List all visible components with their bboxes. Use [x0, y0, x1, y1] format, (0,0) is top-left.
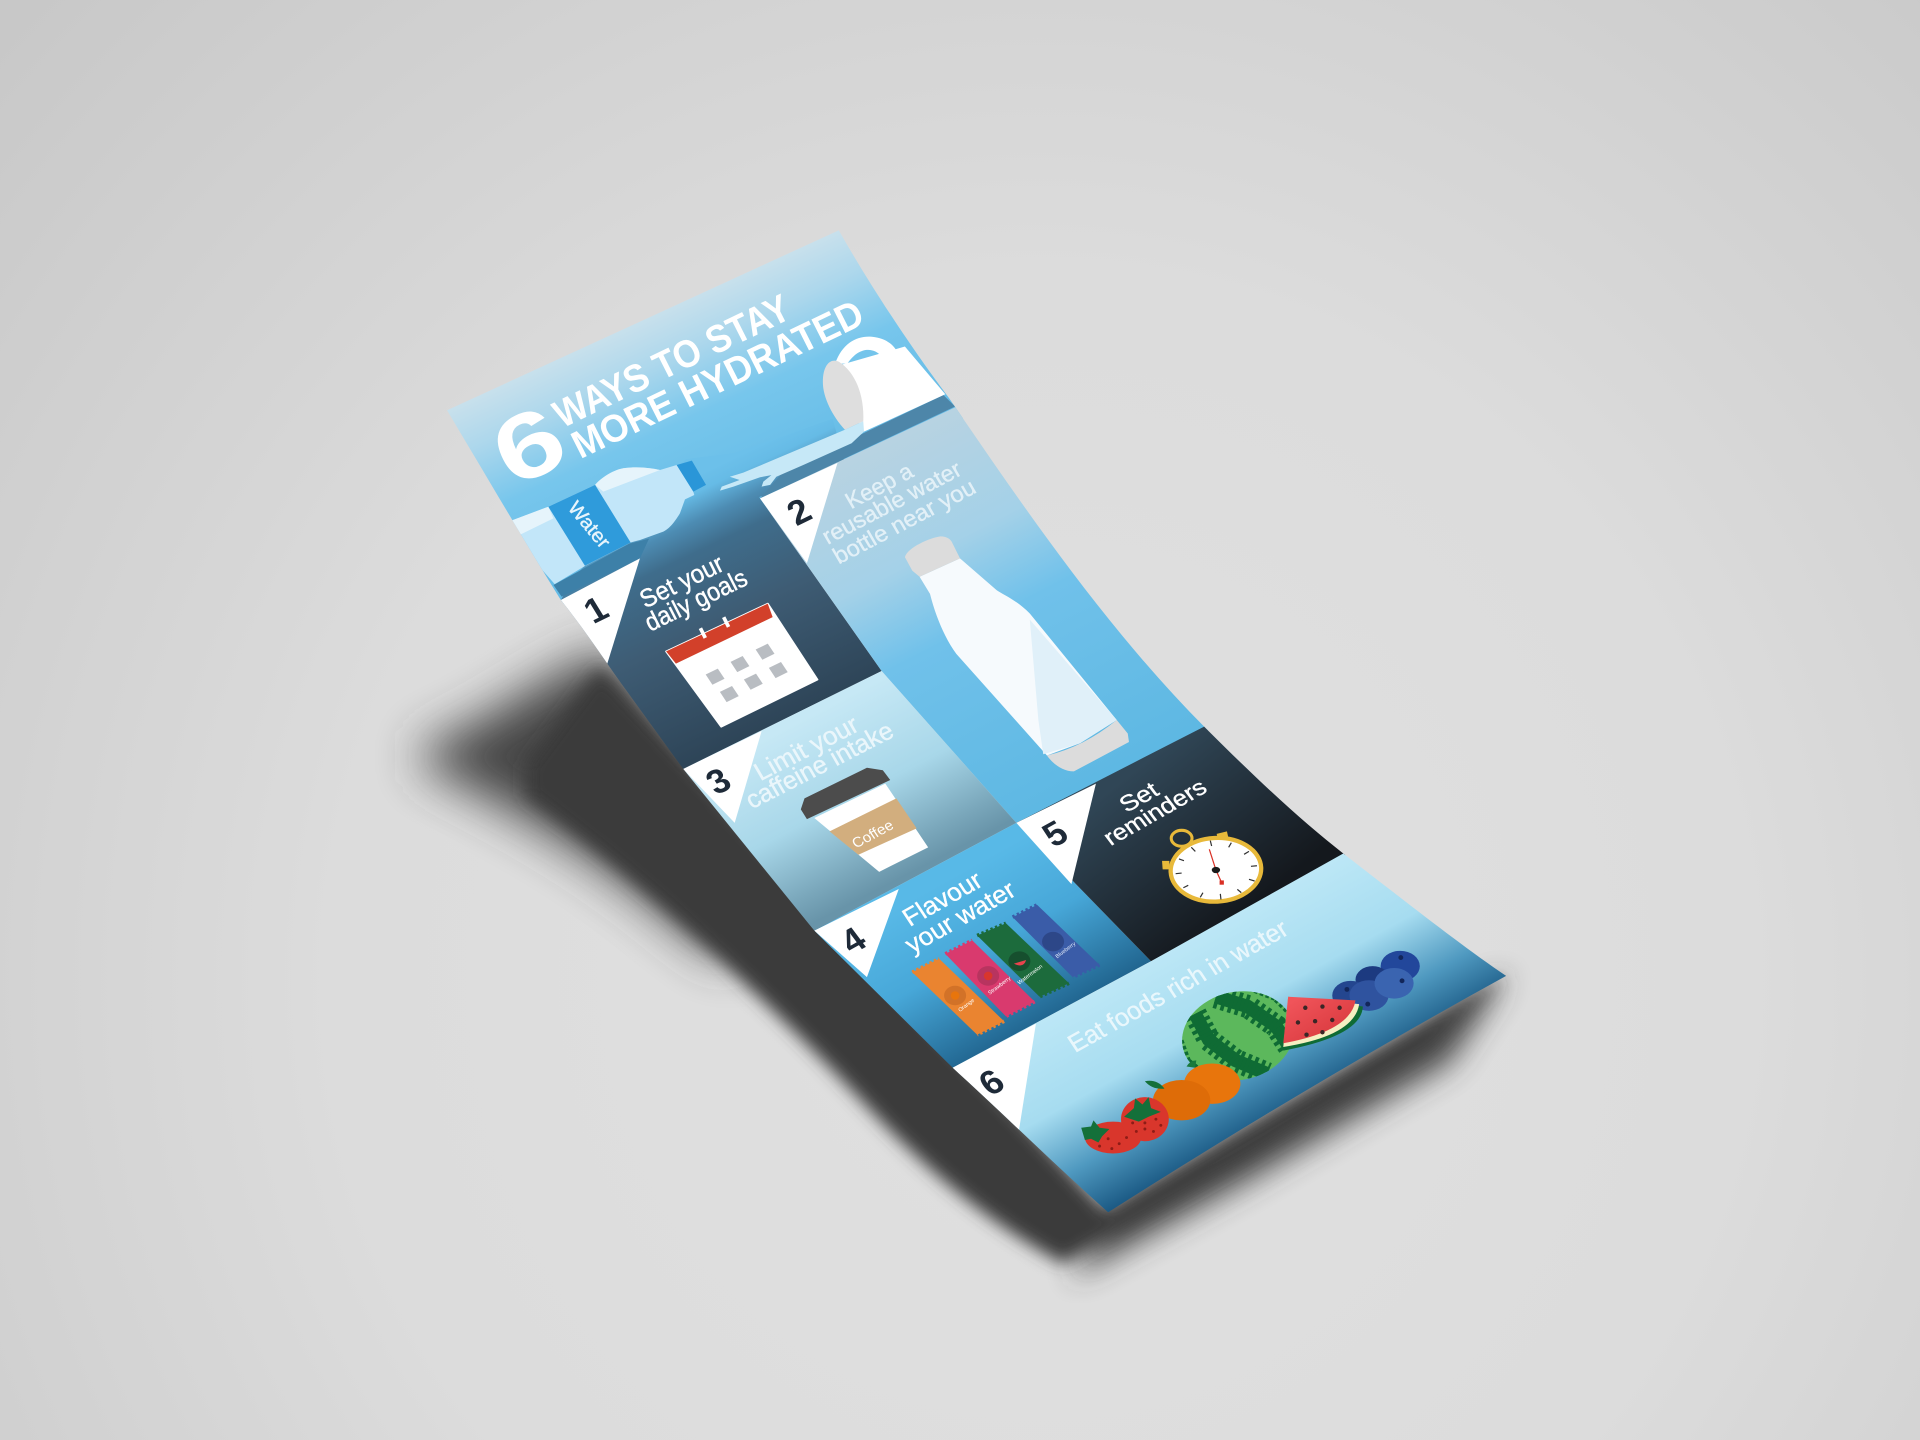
heading: limit your caffeine intake: Limit your [749, 711, 864, 786]
icon: calendar [666, 604, 817, 727]
label: coffee: Coffee [849, 818, 897, 852]
icon: fruit group [1081, 951, 1420, 1153]
sachet: orange [912, 959, 1004, 1035]
heading: set your daily goals: Set your [635, 550, 729, 614]
number tab 3: 3 [698, 760, 738, 802]
number tab 5 [1016, 784, 1096, 884]
sachet: blueberry [1013, 905, 1100, 977]
panel 3: caffeine [683, 671, 1016, 931]
number tab 3 [683, 731, 762, 823]
poster shadow [422, 649, 1509, 1280]
heading: set reminders: Set [1114, 777, 1164, 817]
panel 5: reminders [1016, 722, 1353, 961]
heading: keep a reusable water bottle near you: Keep a [840, 458, 918, 514]
panel 2: reusable bottle [760, 402, 1224, 823]
sachet: watermelon: Watermelon [1017, 964, 1044, 986]
panel: header [447, 230, 967, 606]
number tab 2: 2 [780, 490, 818, 533]
panel 1: set goals [561, 419, 882, 769]
icon: reusable bottle [905, 536, 1129, 771]
number tab 1 [561, 558, 640, 667]
panel 6: foods [953, 853, 1518, 1224]
number tab 6 [953, 1024, 1036, 1131]
heading: set reminders: reminders [1098, 774, 1212, 850]
icon: stopwatch [1162, 830, 1263, 904]
panel 4: flavour [814, 823, 1151, 1068]
number tab 2 [760, 463, 838, 563]
label: water: Water [563, 497, 615, 553]
heading: keep a reusable water bottle near you: bottle near you [828, 474, 980, 569]
heading: keep a reusable water bottle near you: reusable water [817, 456, 966, 549]
sachet: watermelon [977, 923, 1069, 997]
heading: limit your caffeine intake: caffeine intake [741, 717, 899, 815]
poster [447, 230, 1518, 1224]
sachet: blueberry: Blueberry [1055, 941, 1077, 960]
icon: strawberries [1081, 1097, 1169, 1153]
icon: watermelon slice [1283, 997, 1363, 1051]
title: MORE HYDRATED [565, 293, 871, 467]
number tab 1: 1 [577, 588, 615, 631]
icon: blueberries [1332, 951, 1420, 1011]
icon: spilled mug [823, 337, 945, 432]
icon: watermelon [1182, 991, 1290, 1080]
sachet: orange: Orange [958, 998, 976, 1014]
number tab 6: 6 [971, 1062, 1012, 1103]
icon: coffee cup [801, 768, 928, 872]
icon: tipped water bottle [502, 461, 706, 584]
icon: flavour sachets [912, 905, 1100, 1035]
strip: table surface [553, 395, 955, 597]
title: WAYS TO STAY [547, 287, 798, 437]
title [498, 294, 862, 478]
number tab 4 [814, 889, 899, 977]
water spill [720, 421, 864, 491]
heading: flavour your water: Flavour [898, 866, 988, 932]
heading: set your daily goals: daily goals [640, 564, 752, 637]
title: 6 [475, 385, 582, 506]
heading: eat foods rich in water: Eat foods rich in water [1063, 915, 1294, 1058]
sachet: strawberry [945, 940, 1035, 1016]
heading: flavour your water: your water [900, 876, 1021, 959]
icon: oranges [1145, 1060, 1240, 1120]
sachet: strawberry: Strawberry [987, 976, 1012, 997]
number tab 5: 5 [1035, 814, 1076, 855]
number tab 4: 4 [833, 920, 874, 961]
